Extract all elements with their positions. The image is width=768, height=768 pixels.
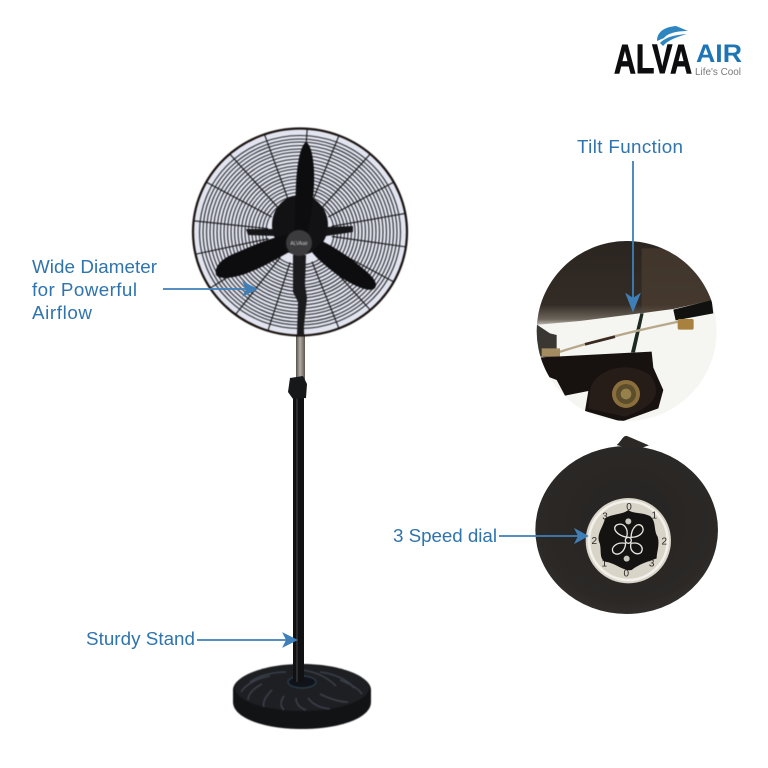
tilt label: Tilt Function [577, 136, 683, 157]
hub brand text: ALVAair [290, 241, 308, 247]
dial numbers: 3 [602, 511, 608, 522]
motor rear bump [617, 436, 649, 450]
logo wordmark: ALVA [614, 36, 692, 82]
pivot bolt [612, 380, 640, 408]
dial ring [586, 498, 671, 583]
callout: wide diameter [32, 256, 256, 323]
left post [536, 324, 557, 358]
sturdy stand label: Sturdy Stand [86, 628, 195, 649]
dial numbers: 1 [602, 559, 608, 570]
dial numbers: 2 [662, 537, 668, 548]
arrow: sturdy stand [197, 634, 296, 646]
callout: wide diameter: Airflow [32, 302, 92, 323]
arrow: speed dial [499, 530, 587, 542]
dial [586, 498, 671, 583]
brass nut [678, 319, 694, 330]
tilt function photo circle [536, 241, 716, 421]
dial numbers: 2 [592, 536, 598, 547]
support strut [631, 313, 644, 352]
logo: Alva Air [614, 26, 742, 82]
tilt rod [558, 321, 682, 352]
fan head [193, 125, 407, 339]
logo wing [657, 26, 688, 46]
fan blades [216, 142, 376, 290]
callout: wide diameter: for Powerful [32, 279, 137, 300]
tilt knob [673, 300, 713, 320]
grille ribs [194, 125, 406, 339]
dial numbers: 0 [626, 502, 632, 513]
tilt bracket [535, 352, 663, 422]
speed dial label: 3 Speed dial [393, 525, 497, 546]
callout: tilt function [577, 136, 683, 310]
knob markers [625, 518, 631, 524]
motor rear housing [535, 446, 718, 614]
dial numbers: 1 [652, 511, 658, 522]
dial numbers: 3 [649, 559, 655, 570]
logo tagline: Life's Cool [695, 67, 741, 78]
fan symbol [612, 524, 643, 554]
fan housing underside [537, 241, 712, 325]
blade stubs [246, 226, 353, 236]
lower pole [293, 392, 304, 682]
height adjuster collar [288, 376, 307, 399]
chrome upper pole [296, 330, 305, 382]
dial numbers [592, 502, 668, 580]
grille background [193, 129, 407, 335]
callout: sturdy stand [86, 628, 296, 649]
wide diameter label: Wide Diameter [32, 256, 157, 277]
grille rings [200, 136, 400, 328]
arrow: tilt [627, 161, 639, 310]
fan base [233, 664, 371, 729]
dial knob [599, 510, 658, 570]
logo air: AIR [696, 40, 742, 68]
speed dial photo circle [535, 436, 718, 614]
arrow: wide diameter [163, 283, 256, 295]
neck bracket [293, 255, 307, 335]
hub cap [286, 230, 312, 256]
dial numbers: 0 [624, 569, 630, 580]
callout: speed dial [393, 525, 587, 546]
motor housing [272, 195, 328, 255]
grille rim [193, 128, 407, 336]
fan product photo [193, 125, 407, 729]
